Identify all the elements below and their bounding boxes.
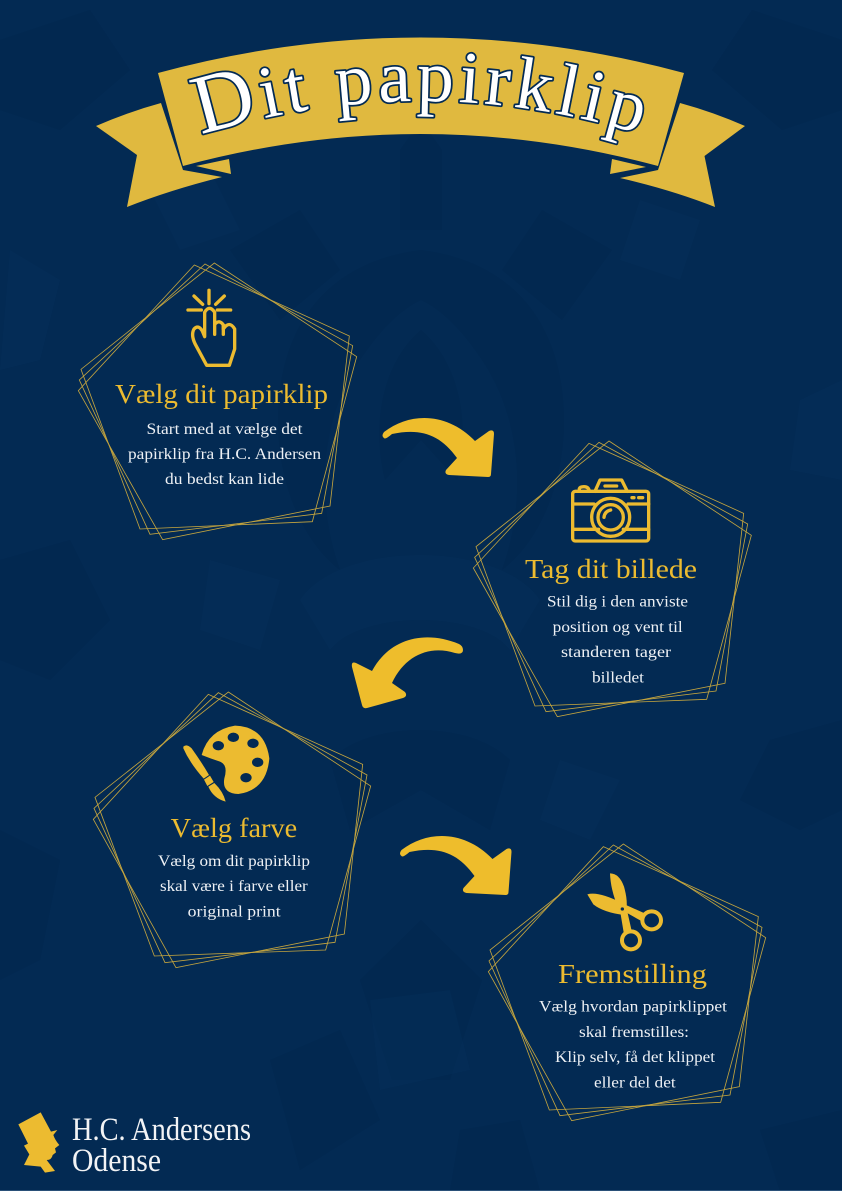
banner main arc	[158, 38, 684, 166]
logo wordmark: Odense	[72, 1143, 161, 1179]
text: step 4 body: Vælg hvordan papirklippet	[539, 999, 728, 1016]
logo	[18, 1112, 251, 1179]
text: step 1 body: papirklip fra H.C. Andersen	[128, 446, 321, 463]
arrow: step 2 to 3	[352, 637, 463, 708]
arrow: step 1 to 2	[382, 418, 494, 477]
text: step 4 body: eller del det	[594, 1075, 676, 1092]
banner right fold	[610, 159, 646, 174]
banner right tail	[620, 103, 745, 207]
text: step 1 body	[128, 421, 321, 488]
text: step 1 body: Start med at vælge det	[146, 421, 303, 438]
text: step 4 body	[539, 999, 728, 1092]
icon: camera	[573, 480, 649, 541]
panel: step 2 photo	[473, 441, 751, 717]
pentagon frame 3	[93, 692, 371, 968]
pentagon frame 1	[78, 263, 357, 540]
text: step 2 body: Stil dig i den anviste	[547, 594, 688, 611]
pentagon frame 4	[488, 844, 766, 1121]
heading: step 3: Vælg farve	[171, 813, 297, 843]
banner	[96, 38, 745, 207]
text: step 3 body: skal være i farve eller	[160, 878, 308, 895]
arrow: step 3 to 4	[400, 836, 512, 895]
text: step 3 body: original print	[188, 904, 281, 921]
panel: step 3 colour	[93, 692, 371, 968]
text: step 3 body: Vælg om dit papirklip	[158, 853, 310, 870]
logo wordmark: H.C. Andersens	[72, 1112, 251, 1148]
pentagon frame 2	[473, 441, 751, 717]
text: step 3 body	[158, 853, 310, 921]
title: Dit papirklip	[187, 52, 644, 146]
text: step 4 body: skal fremstilles:	[579, 1024, 689, 1041]
banner left fold	[196, 159, 231, 174]
icon: palette and brush	[183, 726, 269, 802]
icon: Andersen silhouette	[18, 1112, 59, 1173]
text: step 2 body: position og vent til	[553, 619, 683, 636]
text: step 2 body: billedet	[592, 670, 645, 687]
text: step 2 body: standeren tager	[561, 644, 672, 661]
text: step 1 body: du bedst kan lide	[165, 471, 284, 488]
banner left tail	[96, 103, 222, 207]
heading: step 1: Vælg dit papirklip	[115, 379, 328, 409]
icon: pointing hand	[188, 290, 235, 365]
text: step 4 body: Klip selv, få det klippet	[555, 1049, 716, 1066]
heading: step 2: Tag dit billede	[525, 554, 697, 584]
icon: scissors	[587, 873, 661, 949]
heading: step 4: Fremstilling	[558, 959, 707, 989]
logo wordmark	[72, 1112, 251, 1179]
panel: step 1 choose	[78, 263, 357, 540]
text: step 2 body	[547, 594, 688, 687]
panel: step 4 production	[488, 844, 766, 1121]
